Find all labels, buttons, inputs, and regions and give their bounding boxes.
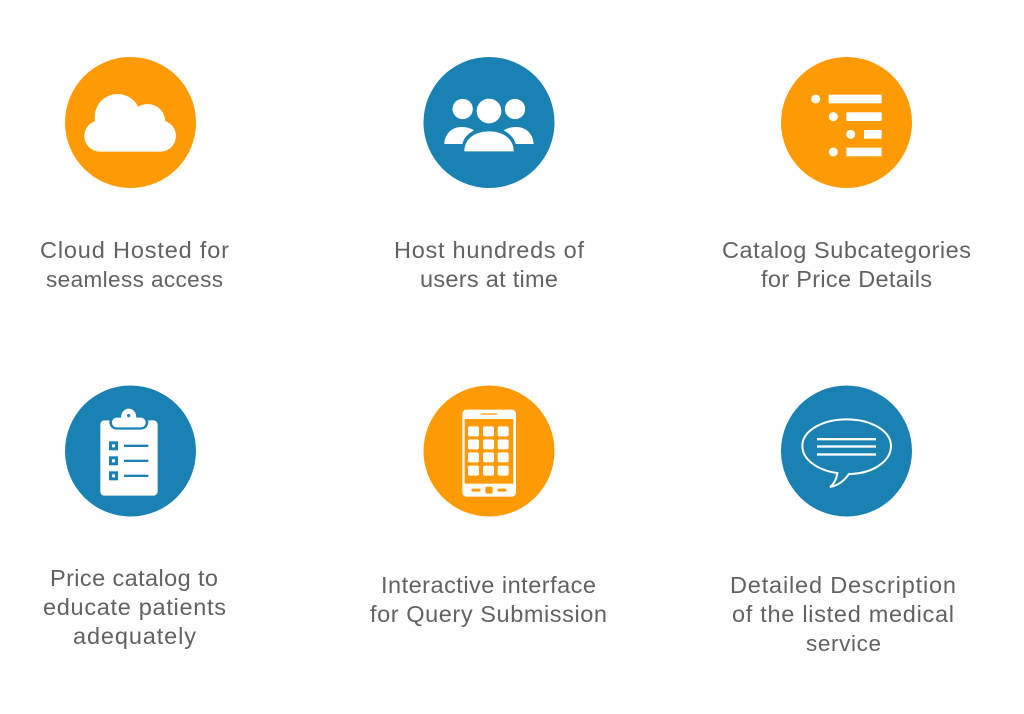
feature: host users [394, 57, 584, 292]
caption: price catalog: Price catalog to [50, 565, 218, 591]
icon: cloud [65, 57, 196, 188]
feature: interactive interface [370, 386, 607, 627]
caption: price catalog [43, 565, 226, 649]
caption: detailed description: Detailed Description [730, 572, 956, 598]
caption: catalog subcategories: for Price Details [761, 266, 932, 292]
caption: price catalog: adequately [73, 623, 196, 649]
caption: detailed description: service [806, 631, 881, 656]
caption: cloud hosted: seamless access [46, 267, 223, 292]
caption: catalog subcategories: Catalog Subcategories [722, 237, 971, 263]
caption: price catalog: educate patients [43, 594, 226, 620]
feature: price catalog [43, 386, 226, 649]
caption: cloud hosted [40, 237, 229, 292]
icon: speech bubble [781, 386, 912, 516]
caption: host users: users at time [420, 266, 558, 292]
icon: indented list [781, 57, 912, 188]
feature: cloud hosted [40, 57, 229, 292]
caption: catalog subcategories [722, 237, 971, 292]
feature: detailed description [730, 386, 956, 656]
caption: detailed description: of the listed medical [732, 601, 954, 627]
caption: interactive interface: for Query Submission [370, 601, 607, 627]
icon: group of people [424, 57, 554, 188]
feature: catalog subcategories [722, 57, 971, 292]
caption: cloud hosted: Cloud Hosted for [40, 237, 229, 263]
caption: host users [394, 237, 584, 292]
icon: smartphone [424, 386, 554, 516]
caption: detailed description [730, 572, 956, 656]
caption: interactive interface [370, 572, 607, 627]
caption: interactive interface: Interactive interface [381, 572, 596, 598]
caption: host users: Host hundreds of [394, 237, 584, 263]
icon: clipboard [65, 386, 196, 516]
